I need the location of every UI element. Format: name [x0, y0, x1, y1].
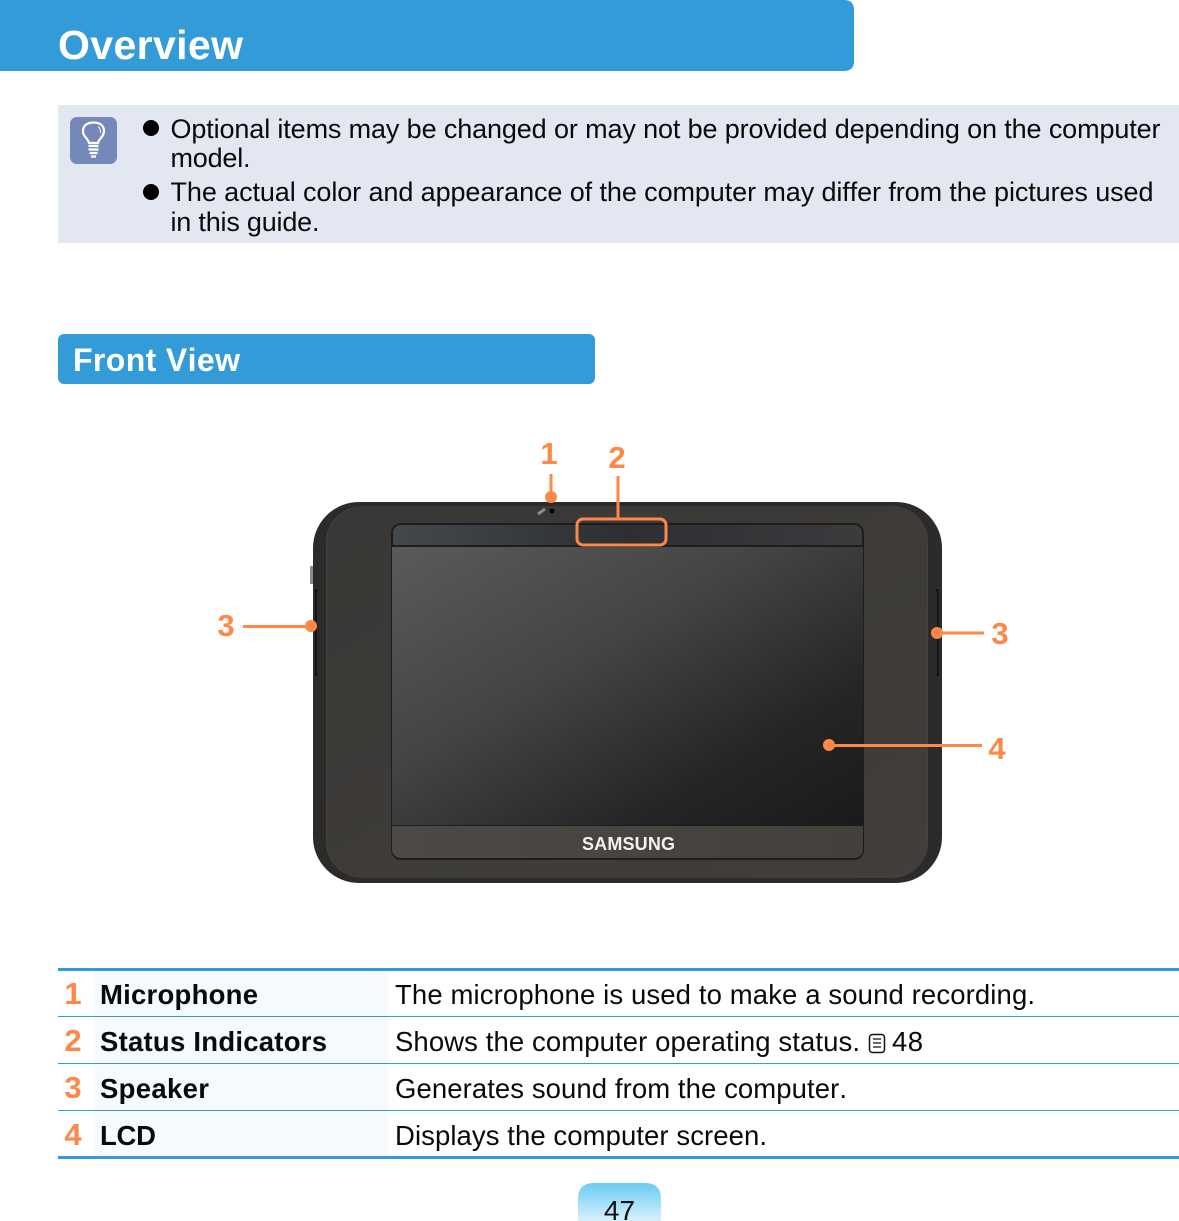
callout 1: microphone: [540, 436, 558, 503]
parts table: [58, 968, 1179, 1159]
status indicator strip: [393, 525, 862, 545]
title banner: Overview: Overview: [58, 22, 243, 68]
bullet list: [143, 114, 1160, 237]
callout 4: LCD: [823, 731, 1006, 766]
bullet list: model.: [170, 143, 250, 173]
row 1: Microphone: [100, 979, 258, 1010]
row 4: [64, 1117, 767, 1152]
callout 3: right speaker: [931, 616, 1009, 651]
row 1: 1: [64, 976, 82, 1011]
page number tab: [578, 1183, 661, 1221]
row 3: 3: [64, 1070, 82, 1105]
LCD screen: [392, 547, 863, 825]
callout 3: left speaker: 3: [217, 608, 235, 643]
callout 4: LCD: 4: [988, 731, 1006, 766]
section heading: Front View: Front View: [73, 342, 240, 378]
row 3: Generates sound from the computer.: [395, 1073, 847, 1104]
callout 3: right speaker: 3: [991, 616, 1009, 651]
logo strip: SAMSUNG: [582, 834, 675, 854]
bullet list: in this guide.: [170, 207, 320, 237]
callout 2: status indicators: 2: [608, 440, 626, 475]
icon: page reference: [870, 1034, 884, 1052]
row 3: [64, 1070, 847, 1105]
row 2: Status Indicators: [100, 1026, 327, 1057]
callout 1: microphone: 1: [540, 436, 558, 471]
row 1: The microphone is used to make a sound recording.: [395, 979, 1035, 1010]
title banner: Overview: [0, 0, 854, 71]
bullet list: The actual color and appearance of the computer may differ from the pictures used: [170, 177, 1154, 207]
note panel: [58, 105, 1179, 243]
row 2: 48: [892, 1026, 923, 1057]
row 2: Shows the computer operating status.: [395, 1026, 860, 1057]
logo strip: [392, 826, 863, 858]
bullet list: Optional items may be changed or may not be provided depending on the computer: [170, 114, 1160, 144]
device illustration: [310, 502, 942, 883]
row 2: [64, 1023, 923, 1058]
callout 3: left speaker: [217, 608, 317, 643]
section heading: Front View: [58, 334, 595, 384]
callout 2: status indicators: [577, 440, 666, 545]
microphone hole: [538, 508, 554, 514]
icon: light bulb: [70, 117, 117, 164]
row 2: 2: [64, 1023, 82, 1058]
row 3: Speaker: [100, 1073, 209, 1104]
row 4: LCD: [100, 1120, 156, 1151]
row 1: [64, 976, 1035, 1011]
row 4: Displays the computer screen.: [395, 1120, 767, 1151]
row 4: 4: [64, 1117, 82, 1152]
